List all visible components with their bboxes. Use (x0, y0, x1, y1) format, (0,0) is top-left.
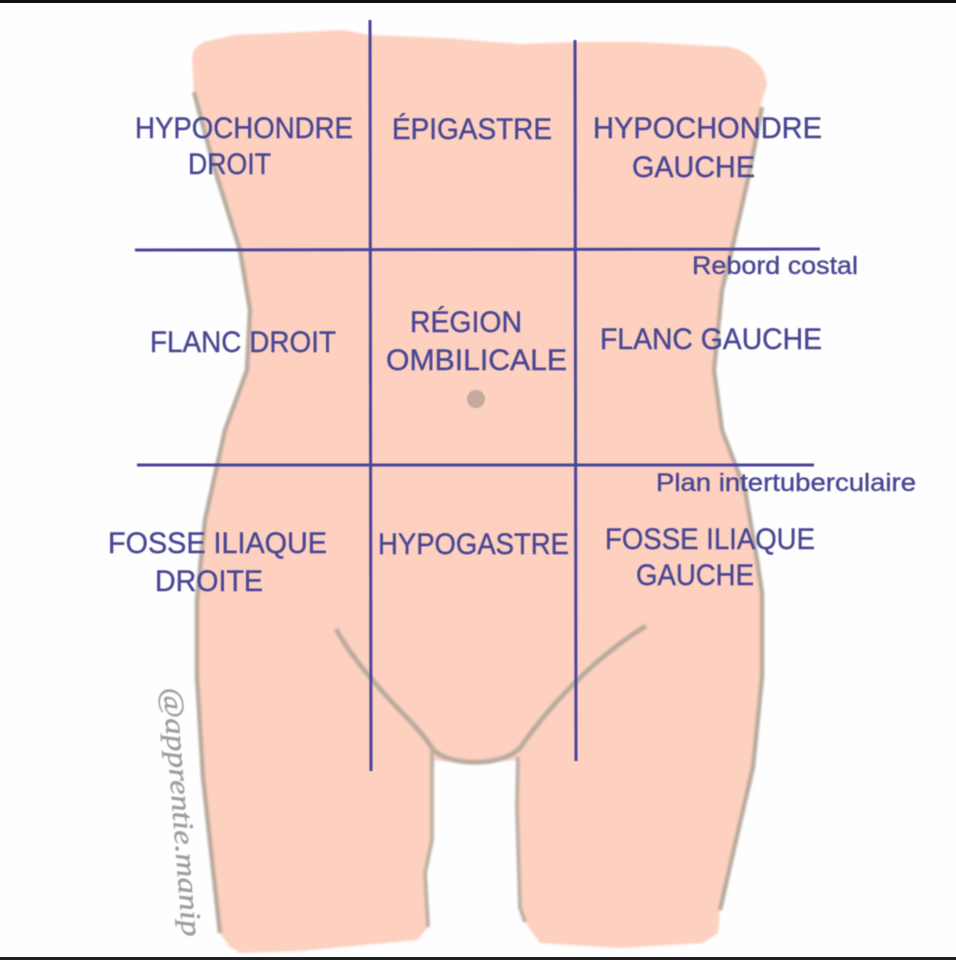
label: fosse iliaque droite: FOSSE ILIAQUE (108, 527, 327, 560)
right outline (714, 107, 762, 910)
label: flanc gauche: FLANC GAUCHE (600, 323, 822, 356)
groin curve (336, 626, 646, 762)
label: hypochondre droit: DROIT (188, 148, 271, 181)
label: hypogastre: HYPOGASTRE (378, 528, 569, 561)
inner thigh left (425, 748, 432, 927)
watermark: @apprentie.manip (156, 686, 207, 938)
label: hypochondre droit (135, 112, 353, 181)
label: region ombilicale: OMBILICALE (386, 344, 567, 377)
label: hypochondre gauche (593, 112, 822, 184)
label: plan intertuberculaire: Plan intertuberculaire (656, 469, 916, 497)
inner thigh right (517, 757, 525, 922)
label: fosse iliaque droite (108, 527, 327, 598)
label: fosse iliaque droite: DROITE (155, 565, 263, 598)
grid lines (135, 20, 820, 771)
label: epigastre: ÉPIGASTRE (392, 113, 552, 146)
label: region ombilicale (386, 306, 567, 377)
body silhouette (192, 30, 767, 953)
label: hypochondre gauche: HYPOCHONDRE (593, 112, 822, 145)
left outline (194, 92, 250, 933)
region labels (108, 112, 916, 598)
navel (467, 390, 485, 408)
label: fosse iliaque gauche: GAUCHE (636, 559, 754, 592)
label: fosse iliaque gauche (605, 523, 815, 592)
label: fosse iliaque gauche: FOSSE ILIAQUE (605, 523, 815, 556)
label: rebord costal: Rebord costal (692, 252, 858, 280)
label: flanc droit: FLANC DROIT (150, 326, 336, 359)
label: region ombilicale: RÉGION (410, 306, 522, 339)
label: hypochondre droit: HYPOCHONDRE (135, 112, 353, 145)
label: hypochondre gauche: GAUCHE (632, 151, 755, 184)
